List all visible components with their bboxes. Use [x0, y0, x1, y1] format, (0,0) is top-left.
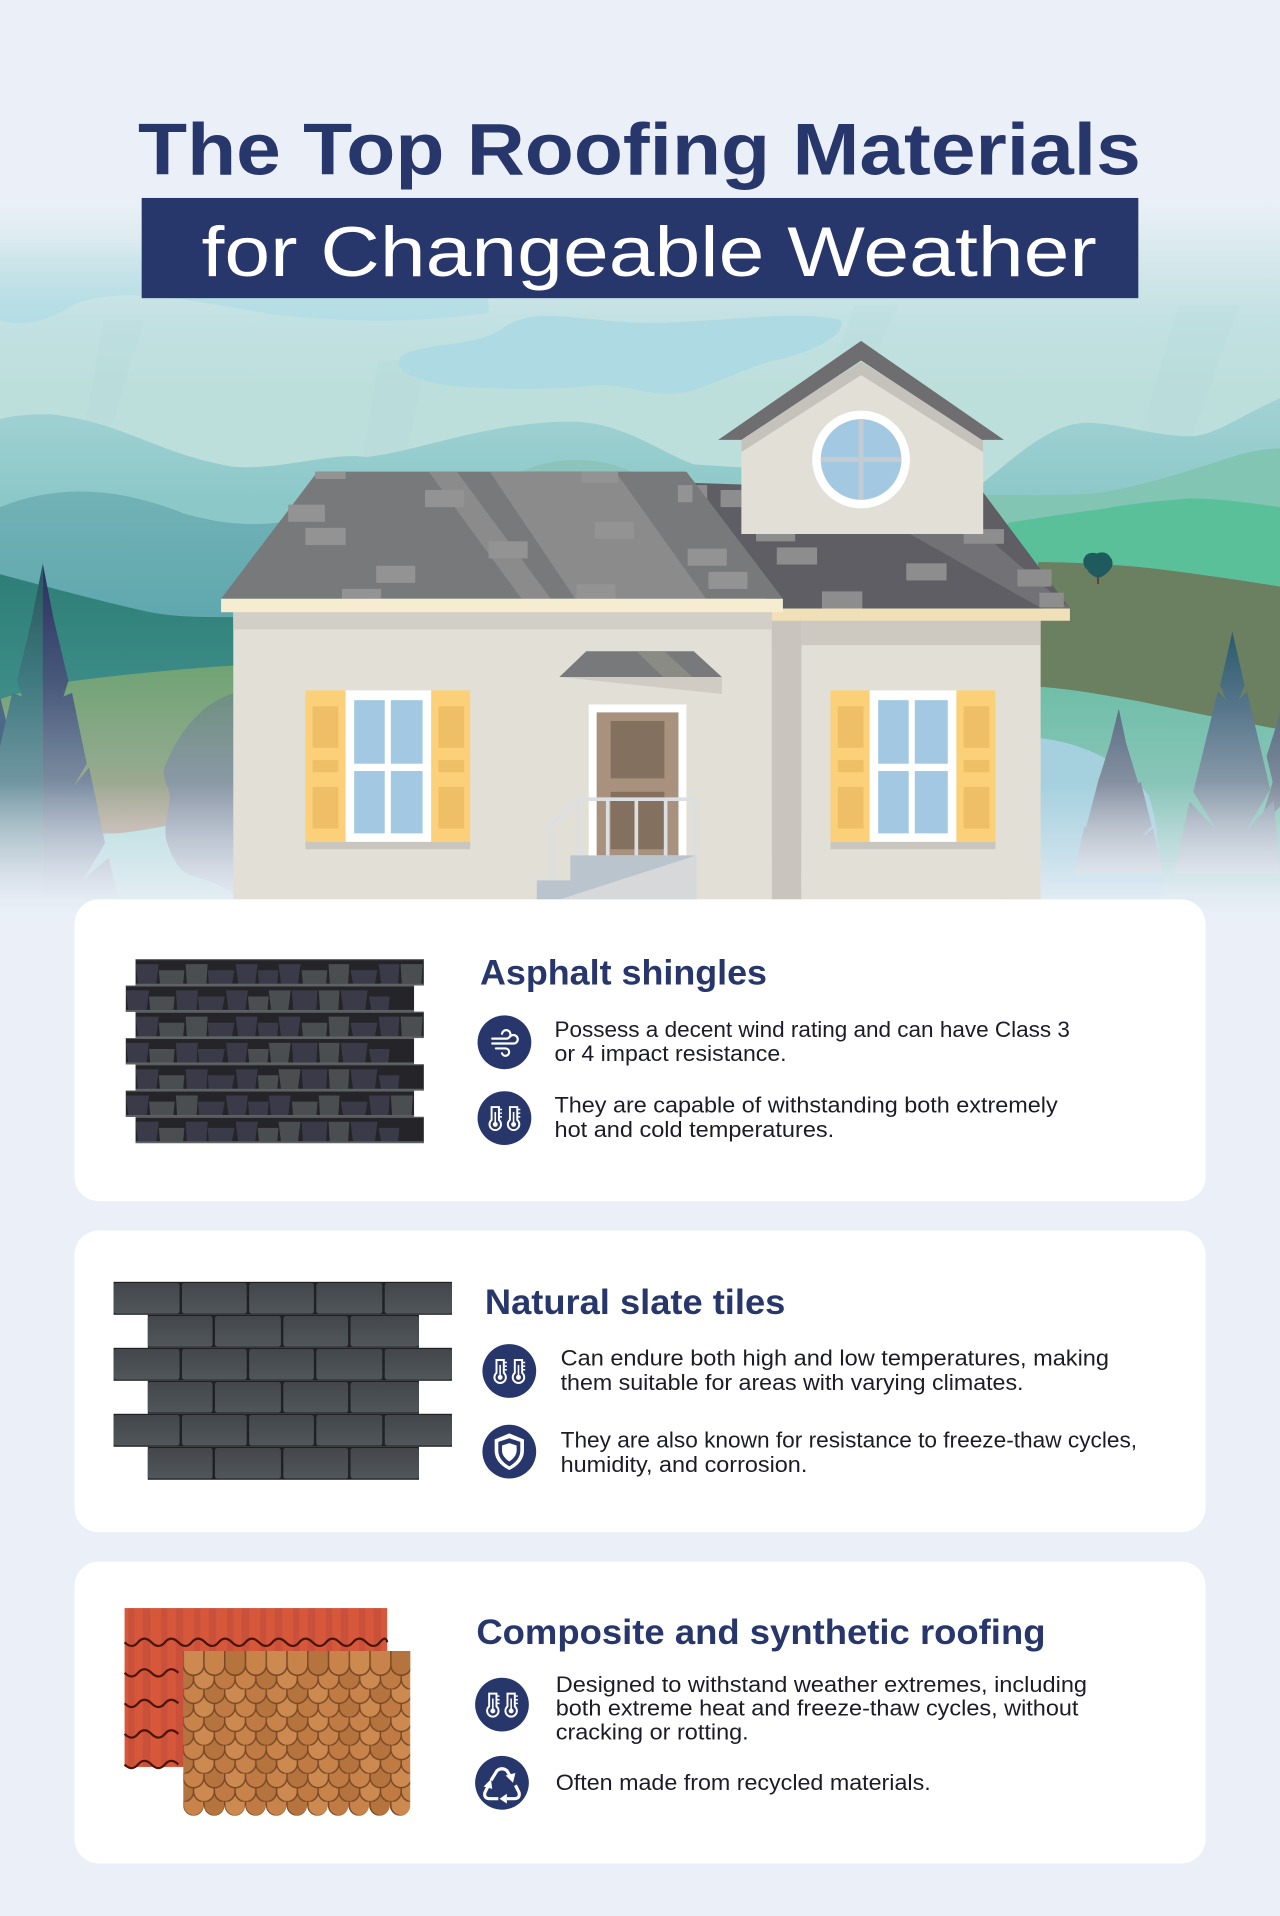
icon: thermometers: [478, 1091, 531, 1145]
water left: [0, 825, 366, 916]
heading: Asphalt shingles: [480, 952, 767, 992]
red tile swatch: [125, 1608, 387, 1768]
text: wind rating: [555, 1017, 1070, 1066]
text: weather extremes: Designed to withstand weather extremes, including: [556, 1672, 1087, 1697]
railing: [544, 799, 696, 880]
panel: composite and synthetic roofing: [75, 1562, 1205, 1863]
sky: [0, 0, 1280, 916]
right eave: [772, 609, 1070, 621]
back roof highlight: [910, 534, 1070, 609]
subtitle banner: for Changeable Weather: [202, 213, 1097, 292]
teal field right: [1038, 687, 1280, 916]
icon: thermometers: [482, 1344, 536, 1398]
brown hill right: [1038, 562, 1280, 729]
cloud: [399, 316, 841, 394]
heading: Natural slate tiles: [485, 1282, 785, 1322]
green hill right: [1008, 499, 1280, 916]
middle hill right: [977, 448, 1280, 916]
small tree: [1083, 552, 1113, 584]
heading: Composite and synthetic roofing: [476, 1612, 1045, 1652]
window left: [305, 690, 470, 849]
bush left: [164, 693, 238, 898]
text: weather extremes: [556, 1672, 1087, 1744]
tree right large: [1174, 632, 1280, 874]
main wall shadow band: [233, 611, 772, 629]
text: wind rating: or 4 impact resistance.: [555, 1041, 787, 1066]
landscape scene: [0, 0, 1280, 916]
house: [221, 341, 1070, 899]
partial tree left edge: [0, 697, 6, 748]
upper cloud band: [0, 232, 489, 323]
panel: natural slate tiles: [75, 1230, 1205, 1532]
text: climates: Can endure both high and low temperatures, making: [561, 1346, 1109, 1371]
small hill behind roof: [513, 460, 641, 477]
middle hill left: [0, 492, 366, 916]
dormer window: [812, 411, 910, 508]
steps: [537, 855, 696, 899]
back roof shingles: [678, 485, 1064, 609]
dormer inner roof: [741, 362, 983, 452]
wall pillar: [772, 618, 801, 899]
tree left: [0, 563, 118, 898]
text: wind rating: Possess a decent wind rating and can have Class 3: [555, 1017, 1070, 1042]
right wall: [801, 621, 1041, 899]
subtitle banner: [142, 198, 1138, 298]
text: temperatures: [555, 1093, 1058, 1142]
text: weather extremes: cracking or rotting.: [556, 1719, 749, 1744]
tan scallop swatch: [183, 1651, 410, 1817]
icon: wind: [478, 1015, 531, 1069]
water right: [1038, 738, 1163, 916]
icon: recycle: [475, 1756, 529, 1810]
icon: shield: [482, 1425, 536, 1479]
dark hill left: [0, 574, 366, 916]
right wall shadow band: [772, 618, 1041, 645]
main roof: [221, 472, 783, 599]
slate swatch: [114, 1282, 452, 1480]
text: climates: [561, 1346, 1109, 1395]
ground fade: [0, 782, 1280, 916]
title: The Top Roofing Materials: [138, 109, 1141, 191]
dormer wall: [741, 373, 983, 534]
back roof: [686, 483, 1070, 609]
text: temperatures: hot and cold temperatures.: [555, 1117, 834, 1142]
shingle swatch: [126, 959, 424, 1143]
door: [589, 704, 686, 856]
icon: thermometers: [475, 1678, 529, 1731]
tree right edge: [1258, 714, 1280, 898]
text: resistance: [561, 1427, 1137, 1477]
porch roof: [559, 651, 722, 694]
text: recycled: Often made from recycled materials.: [556, 1770, 931, 1795]
text: resistance: They are also known for resistance to freeze-thaw cycles,: [561, 1427, 1137, 1452]
dormer roof: [718, 341, 1004, 440]
main eave: [221, 599, 783, 612]
text: weather extremes: both extreme heat and freeze-thaw cycles, without: [556, 1696, 1078, 1721]
far hills: [0, 398, 1280, 916]
main wall: [233, 611, 772, 899]
panel: asphalt shingles: [75, 899, 1205, 1201]
text: resistance: humidity, and corrosion.: [561, 1452, 807, 1477]
tree right small: [1074, 709, 1163, 874]
main roof light strips: [429, 472, 706, 599]
green hill left: [0, 665, 366, 855]
text: climates: them suitable for areas with varying climates.: [561, 1370, 1024, 1395]
rain streaks: [79, 305, 1240, 544]
text: temperatures: They are capable of withstanding both extremely: [555, 1093, 1058, 1118]
window right: [831, 690, 995, 849]
main roof shingles: [288, 472, 747, 599]
